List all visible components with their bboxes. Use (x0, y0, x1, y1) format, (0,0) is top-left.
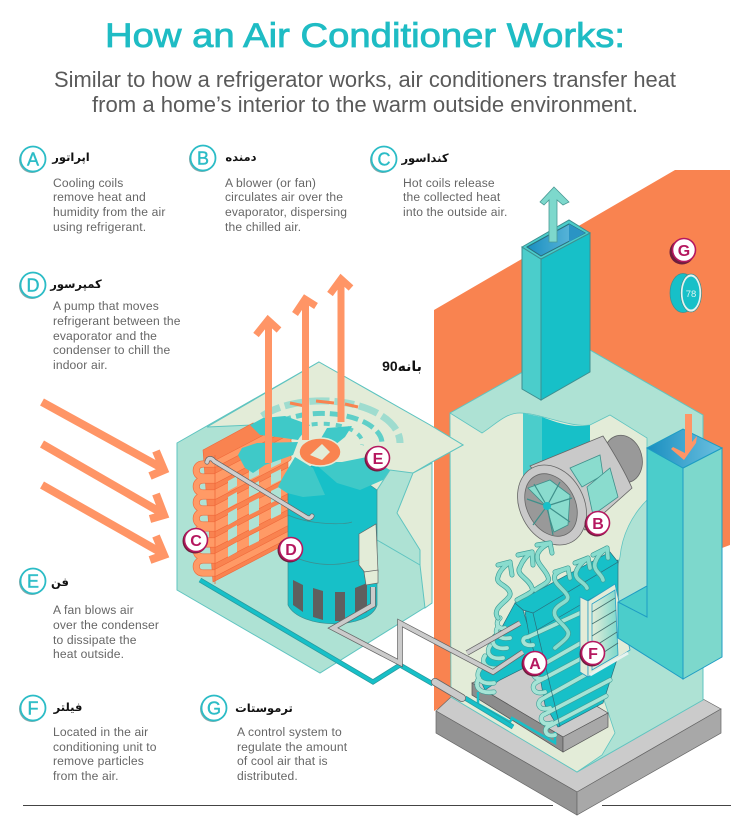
marker E: E (373, 451, 384, 468)
arrow: outside air in bottom (42, 485, 164, 560)
legend: F filter: from the air. (53, 769, 119, 783)
legend: C condenser: Hot coils release (403, 176, 495, 190)
legend: G thermostat: regulate the amount (237, 740, 348, 754)
arrow: air leaving duct (540, 187, 569, 242)
legend: C condenser: C (378, 150, 390, 170)
legend: D compressor: refrigerant between the (53, 314, 181, 328)
legend: B blower (189, 146, 347, 234)
fan hub (299, 438, 341, 466)
arrow: outside air in middle (42, 444, 164, 519)
legend: G thermostat: of cool air that is (237, 754, 328, 768)
fan blades (238, 416, 390, 497)
subtitle (54, 67, 676, 117)
platform base (436, 640, 721, 815)
supply duct inner channel (523, 413, 590, 490)
arrow: air entering duct (671, 414, 697, 460)
legend: E fan: heat outside. (53, 647, 124, 661)
marker D (278, 538, 302, 562)
legend: B blower: evaporator, dispersing (225, 205, 347, 219)
marker C: C (190, 533, 202, 550)
legend: A evaporator: اپراتور (51, 152, 90, 165)
marker F (580, 642, 604, 666)
legend: A evaporator: humidity from the air (53, 205, 166, 219)
arrow: hot air rising left (256, 320, 279, 463)
legend: F filter: فیلتر (53, 702, 82, 714)
legend: E fan: over the condenser (53, 618, 159, 632)
legend: G thermostat: ترموستات (235, 703, 293, 716)
legend: G thermostat: distributed. (237, 769, 298, 783)
legend: A evaporator: using refrigerant. (53, 220, 146, 234)
legend: D compressor: کمپرسور (49, 279, 102, 292)
legend: A evaporator: A (27, 150, 39, 170)
legend: B blower: B (197, 148, 209, 168)
arrow: hot air rising right (330, 279, 351, 422)
legend: D compressor: condenser to chill the (53, 343, 171, 357)
orange house wall (434, 170, 730, 711)
legend: E fan: A fan blows air (53, 603, 134, 617)
evaporator tray (472, 660, 608, 752)
legend: B blower: A blower (or fan) (225, 176, 316, 190)
legend: E fan: E (27, 572, 39, 592)
legend: F filter: conditioning unit to (53, 740, 157, 754)
legend: E fan (19, 568, 159, 661)
legend: F filter: Located in the air (53, 725, 148, 739)
thermostat (670, 274, 702, 312)
footer rule right (602, 805, 731, 806)
marker D: D (285, 542, 297, 559)
refrigerant tube over coil (207, 458, 312, 518)
legend: A evaporator: Cooling coils (53, 176, 123, 190)
arrow: hot air rising centre (295, 299, 316, 440)
legend: C condenser: کنداسور (400, 153, 449, 166)
title: How an Air Conditioner Works: (105, 17, 625, 55)
condenser coil (196, 423, 288, 584)
fan grille (262, 401, 400, 445)
footer rule left (23, 805, 553, 806)
legend: F filter (19, 696, 157, 783)
subtitle: Similar to how a refrigerator works, air conditioners transfer heat (54, 67, 676, 92)
coil windows (228, 453, 281, 557)
blower (504, 431, 648, 557)
marker E (364, 446, 390, 472)
marker A (522, 652, 546, 676)
legend: D compressor (19, 272, 181, 372)
legend: D compressor: A pump that moves (53, 299, 159, 313)
legend: G thermostat: G (207, 698, 221, 718)
legend: D compressor: evaporator and the (53, 329, 157, 343)
return duct (618, 429, 722, 679)
legend: F filter: remove particles (53, 754, 144, 768)
legend: B blower: circulates air over the (225, 190, 343, 204)
furnace shell (450, 342, 703, 772)
legend: C condenser: into the outside air. (403, 205, 507, 219)
legend: E fan: to dissipate the (53, 633, 137, 647)
legend: F filter: F (28, 698, 38, 718)
legend: A evaporator: remove heat and (53, 190, 146, 204)
legend: D compressor: D (26, 276, 40, 296)
marker F: F (588, 646, 598, 663)
air filter (580, 584, 630, 677)
marker B (584, 512, 610, 536)
evaporator coil (477, 552, 620, 736)
legend: G thermostat: A control system to (237, 725, 342, 739)
legend: D compressor: indoor air. (53, 358, 108, 372)
outdoor condenser box (177, 362, 463, 673)
marker G (670, 238, 696, 264)
legend: C condenser (370, 146, 507, 219)
furnace cut-away interior (450, 413, 647, 772)
marker C (182, 528, 208, 554)
compressor (288, 465, 378, 624)
marker B: B (592, 516, 604, 533)
legend: G thermostat (200, 696, 348, 783)
upper supply duct (522, 220, 590, 400)
marker G: G (678, 243, 690, 260)
refrigerant lines (333, 587, 523, 698)
overlay label: بانه90 (382, 358, 422, 374)
legend: B blower: the chilled air. (225, 220, 301, 234)
marker A: A (529, 656, 541, 673)
teal pipe to condenser (200, 580, 513, 727)
legend: E fan: فن (51, 577, 69, 589)
legend: A evaporator (19, 146, 166, 234)
arrow: outside air in top (42, 402, 164, 476)
subtitle: from a home’s interior to the warm outside environment. (92, 92, 638, 117)
legend: B blower: دمنده (225, 152, 257, 164)
wavy cold air arrows (496, 543, 608, 648)
legend: C condenser: the collected heat (403, 190, 501, 204)
thermostat: 78 (686, 289, 696, 300)
